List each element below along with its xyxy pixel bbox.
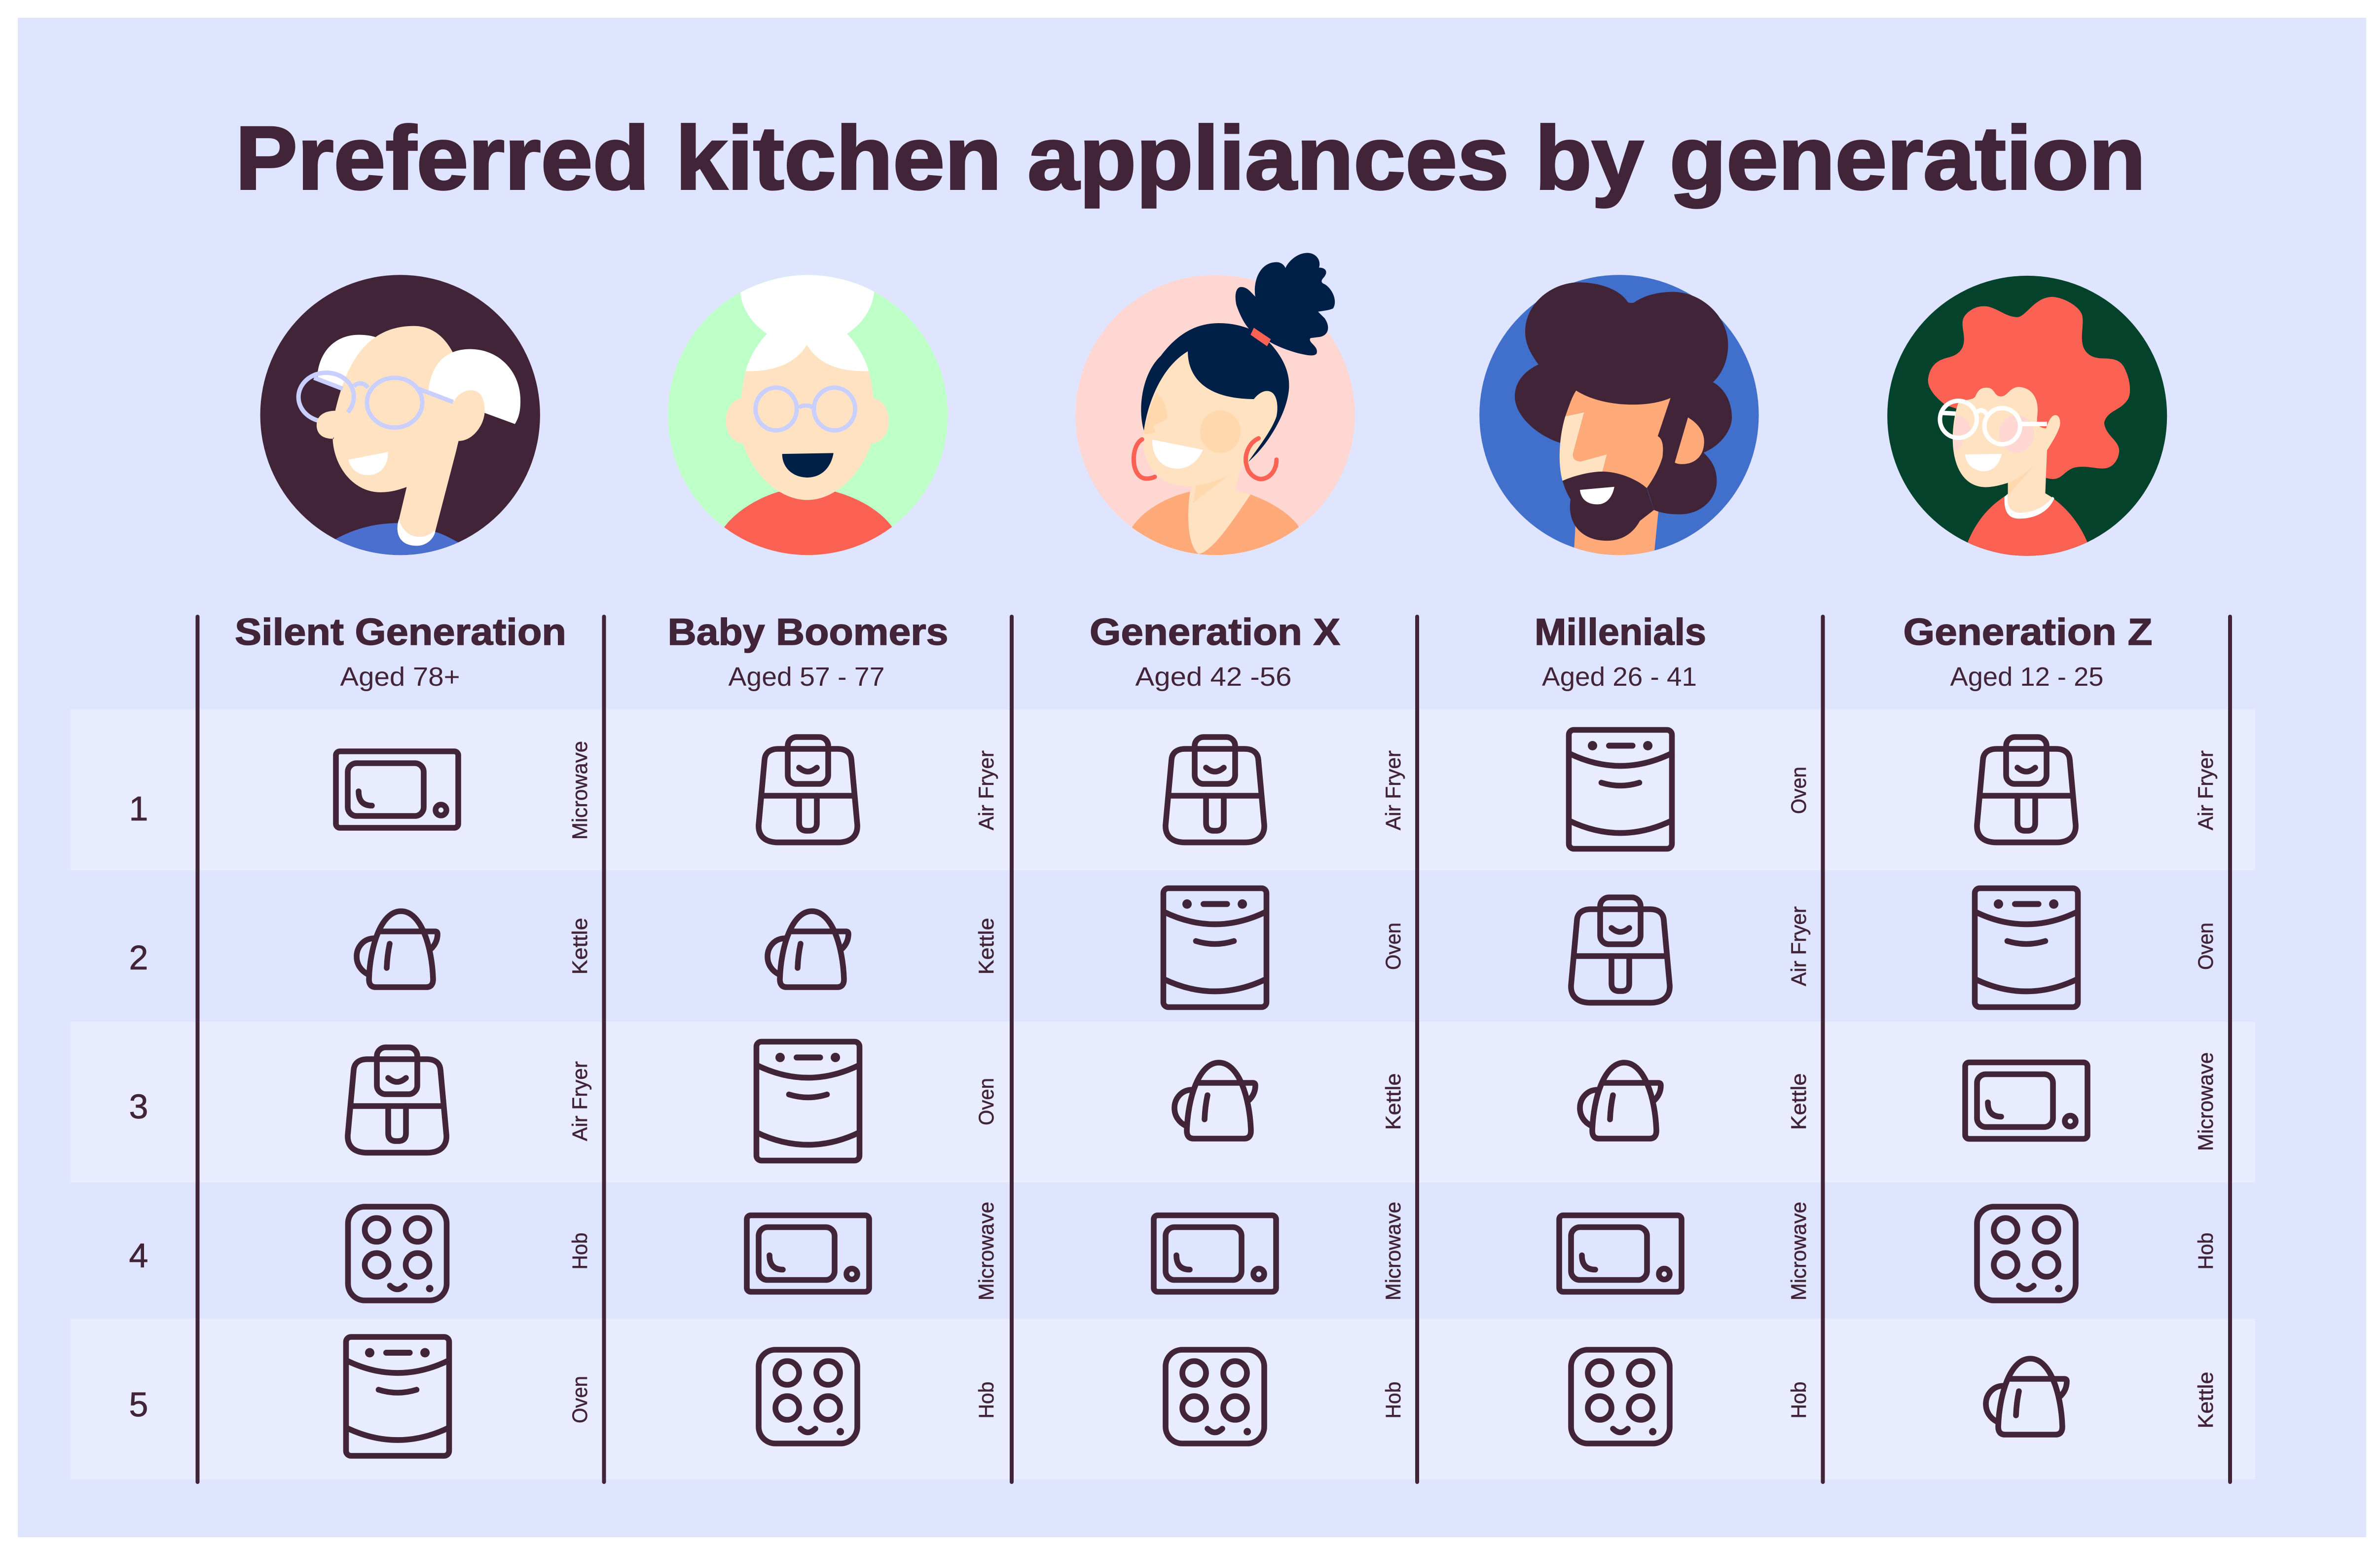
label: Oven: Oven [1787,767,1811,814]
title: Preferred kitchen appliances by generation [235,108,2146,208]
label: Microwave: Microwave [568,741,592,840]
column: Generation X [1090,611,1405,1443]
icon: kettle [1986,1359,2067,1435]
label: Air Fryer: Air Fryer [1382,750,1405,830]
header: Millenials: Millenials [1535,611,1706,653]
age: Aged 42 -56: Aged 42 -56 [1135,662,1291,692]
label: Hob: Hob [568,1232,592,1270]
label: Air Fryer: Air Fryer [2194,750,2218,830]
icon: hob [348,1207,447,1300]
icon: kettle [1580,1063,1661,1139]
label: Oven: Oven [568,1376,592,1423]
header: Generation X: Generation X [1090,611,1340,653]
label: Air Fryer: Air Fryer [568,1061,592,1141]
icon: oven [757,1042,859,1160]
column: Baby Boomers [668,611,998,1443]
label: Hob: Hob [2194,1232,2218,1270]
icon: oven [1163,888,1267,1007]
icon: kettle [1174,1063,1255,1139]
label: Hob: Hob [1382,1381,1405,1419]
label: Air Fryer: Air Fryer [1787,906,1811,986]
column divider lines [197,617,2230,1482]
avatar: Generation X [1075,253,1355,555]
label: Oven: Oven [1382,923,1405,970]
rank numbers: 4 [129,1236,148,1275]
rank numbers [129,789,148,1424]
label: Oven: Oven [975,1078,998,1125]
icon: air fryer [348,1047,446,1153]
avatar: Silent Generation [260,275,540,555]
label: Microwave: Microwave [2194,1052,2218,1151]
label: Microwave: Microwave [1382,1202,1405,1300]
icon: microwave [336,751,458,828]
header: Generation Z: Generation Z [1903,611,2153,653]
table row bands [71,709,2255,1480]
column: Millenials [1535,611,1811,1443]
icon: microwave [1559,1216,1682,1292]
rank numbers: 5 [129,1385,148,1424]
label: Microwave: Microwave [975,1202,998,1300]
avatar: Millenials [1479,275,1759,555]
age: Aged 78+: Aged 78+ [340,662,460,692]
icon: air fryer [1166,737,1264,843]
label: Kettle: Kettle [1787,1073,1811,1130]
icon: microwave [1965,1063,2087,1139]
rank numbers: 2 [129,938,148,977]
header: Baby Boomers: Baby Boomers [668,611,948,653]
label: Kettle: Kettle [975,918,998,975]
label: Kettle: Kettle [568,918,592,975]
icon: air fryer [759,737,857,843]
icon: air fryer [1977,737,2076,843]
icon: oven [346,1337,449,1456]
icon: hob [1977,1207,2076,1300]
icon: oven [1975,888,2078,1007]
rank numbers: 3 [129,1087,148,1126]
label: Microwave: Microwave [1787,1202,1811,1300]
header: Silent Generation: Silent Generation [235,611,566,653]
rank numbers: 1 [129,789,148,828]
icon: kettle [357,911,438,987]
label: Kettle: Kettle [2194,1371,2218,1429]
label: Kettle: Kettle [1382,1073,1405,1130]
icon: oven [1569,730,1672,849]
icon: microwave [747,1216,869,1292]
age: Aged 12 - 25: Aged 12 - 25 [1950,662,2103,692]
icon: hob [1571,1350,1670,1443]
icon: hob [1166,1350,1264,1443]
label: Air Fryer: Air Fryer [975,750,998,830]
column: Silent Generation [235,611,592,1456]
icon: air fryer [1571,897,1670,1003]
age: Aged 26 - 41: Aged 26 - 41 [1542,662,1697,692]
avatar: Generation Z [1887,276,2167,556]
avatar: Baby Boomers [668,275,948,555]
icon: kettle [768,911,848,987]
label: Hob: Hob [1787,1381,1811,1419]
avatars group [260,253,2167,556]
icon: microwave [1154,1216,1276,1292]
icon: hob [759,1350,857,1443]
label: Hob: Hob [975,1381,998,1419]
column: Generation Z [1903,611,2218,1435]
label: Oven: Oven [2194,923,2218,970]
age: Aged 57 - 77: Aged 57 - 77 [728,662,885,692]
